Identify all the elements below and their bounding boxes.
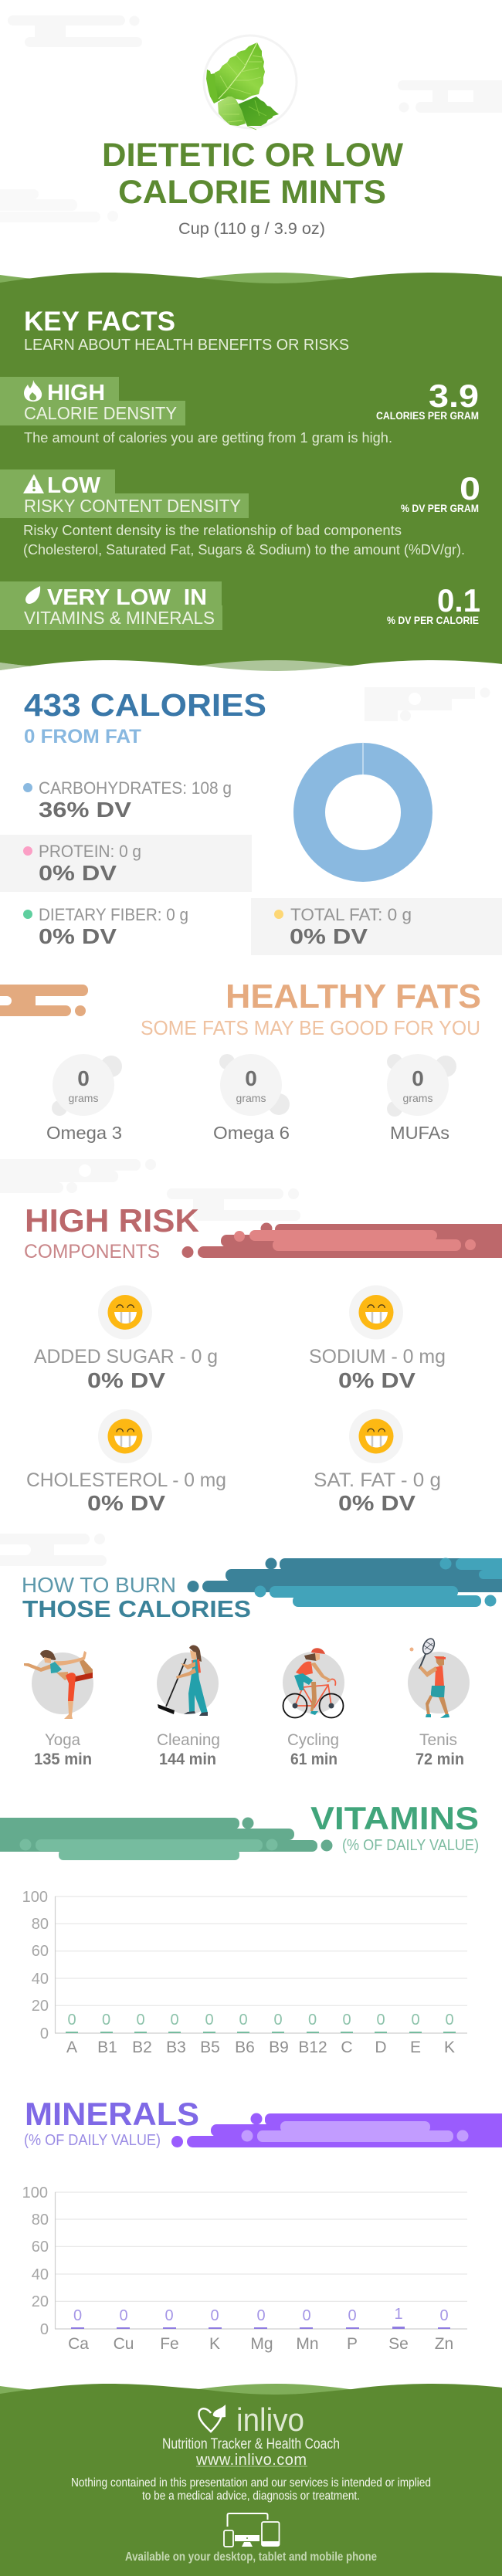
panel: healthy fats [0, 978, 481, 1143]
bar chart: vitamins: 0 [67, 2012, 76, 2029]
icon: mint leaf in circle [204, 36, 297, 130]
bar chart: minerals: 40 [32, 2266, 49, 2283]
component: saturated fat: SAT. FAT - 0 g [314, 1469, 441, 1491]
activity labels: 61 min [290, 1751, 337, 1768]
bar chart: vitamins: 40 [32, 1971, 49, 1988]
fact: vitamins and minerals: % DV PER CALORIE [387, 615, 479, 626]
donut chart [309, 742, 417, 866]
fact: calorie density: CALORIE DENSITY [24, 403, 177, 423]
stat: omega 6: grams [236, 1092, 266, 1104]
website link: www.inlivo.com [195, 2452, 307, 2469]
fact: calorie density: HIGH [47, 381, 105, 405]
bar chart: minerals: Zn [435, 2335, 453, 2353]
nutrient: dietary fiber: 0% DV [39, 924, 117, 948]
nutrient: dietary fiber [23, 905, 188, 948]
decorative band: teal [187, 1558, 502, 1607]
bar chart: vitamins: 60 [32, 1943, 49, 1960]
bar chart: minerals: 0 [165, 2307, 174, 2324]
fact: calorie density: 3.9 [429, 378, 479, 414]
bar chart: minerals [22, 2185, 467, 2353]
bar chart: vitamins: 0 [102, 2012, 110, 2029]
heading: THOSE CALORIES [22, 1595, 251, 1622]
bar chart: vitamins: 20 [32, 1998, 49, 2015]
component: cholesterol: 0% DV [87, 1491, 165, 1515]
bar chart: minerals: 1 [394, 2306, 403, 2323]
stat: mufas: grams [403, 1092, 432, 1104]
panel: vitamins [0, 1800, 479, 2056]
stat: omega 3: Omega 3 [46, 1123, 122, 1143]
fact: risky content density: Risky Content density is the relationship of bad components [23, 523, 402, 538]
fact: calorie density: The amount of calories you are getting from 1 gram is high. [24, 430, 392, 446]
stat: omega 6: 0 [245, 1066, 257, 1090]
activity labels: Yoga [45, 1731, 80, 1749]
bar chart: minerals: Ca [68, 2335, 89, 2353]
bar chart: minerals: 0 [210, 2307, 219, 2324]
activity: cleaning [157, 1646, 219, 1716]
heading: key facts: KEY FACTS [24, 307, 175, 337]
bar chart: vitamins: 0 [445, 2012, 454, 2029]
subheading: components: COMPONENTS [24, 1241, 160, 1263]
stat: mufas: 0 [412, 1066, 424, 1090]
fact: risky content density [0, 469, 480, 558]
fact: vitamins and minerals [0, 581, 480, 630]
subheading: (% OF DAILY VALUE) [342, 1837, 479, 1854]
icon: devices [224, 2513, 280, 2547]
bar chart: minerals: 80 [32, 2212, 49, 2229]
stat: mufas [387, 1054, 456, 1143]
panel: calories [0, 687, 502, 955]
nutrient: protein: 0% DV [39, 861, 117, 885]
bar chart: vitamins: 0 [411, 2012, 420, 2029]
panel: high risk components [24, 1202, 502, 1515]
component: added sugar: ADDED SUGAR - 0 g [34, 1346, 218, 1368]
activity labels: 144 min [159, 1751, 216, 1768]
panel: key facts [0, 273, 502, 673]
bar chart: vitamins: K [444, 2039, 455, 2056]
component: sodium [309, 1285, 446, 1392]
component: sodium: 0% DV [338, 1368, 416, 1392]
bar chart: vitamins: B1 [97, 2039, 117, 2056]
activity: tennis [408, 1637, 470, 1718]
bar chart: vitamins: C [341, 2039, 353, 2056]
bar chart: minerals: 100 [22, 2185, 48, 2201]
stat: omega 3: grams [69, 1092, 98, 1104]
panel: how to burn those calories [22, 1558, 502, 1768]
decorative cloud: top right [398, 80, 502, 113]
stat: omega 3 [46, 1054, 122, 1143]
bar chart: vitamins: B5 [200, 2039, 220, 2056]
bar chart: minerals: Mg [250, 2335, 273, 2353]
component: cholesterol [26, 1409, 226, 1515]
decorative band: peach [0, 985, 88, 1016]
bar chart: vitamins: 0 [376, 2012, 385, 2029]
title: CALORIE MINTS [118, 174, 386, 211]
bar chart: minerals: 0 [302, 2307, 311, 2324]
stat: omega 6 [213, 1054, 290, 1143]
logo: inlivo: inlivo [236, 2401, 304, 2438]
bar chart: minerals: 0 [256, 2307, 266, 2324]
bar chart: vitamins: D [375, 2039, 387, 2056]
nutrient: total fat [274, 905, 412, 948]
bar chart: minerals: Fe [160, 2335, 179, 2353]
bar chart: minerals: Se [388, 2335, 409, 2353]
subheading: (% OF DAILY VALUE) [24, 2132, 161, 2149]
activity labels: 72 min [416, 1751, 464, 1768]
bar chart: minerals: 0 [348, 2307, 357, 2324]
heading: high risk: HIGH RISK [25, 1202, 199, 1239]
component: saturated fat [314, 1409, 441, 1515]
fact: risky content density: LOW [47, 473, 101, 498]
stat: omega 6: Omega 6 [213, 1123, 290, 1143]
subheading: SOME FATS MAY BE GOOD FOR YOU [141, 1016, 480, 1039]
activity labels: Cleaning [157, 1731, 220, 1749]
nutrient: carbohydrates: 36% DV [39, 798, 131, 822]
stat: mufas: MUFAs [390, 1123, 449, 1143]
heading: vitamins: VITAMINS [310, 1800, 479, 1836]
bar chart: vitamins: 0 [136, 2012, 145, 2029]
availability note: Available on your desktop, tablet and mobile phone [125, 2551, 377, 2564]
panel: footer [0, 2384, 502, 2576]
serving size: Cup (110 g / 3.9 oz) [178, 220, 325, 238]
decorative band: purple [171, 2113, 502, 2147]
activity: yoga [24, 1650, 93, 1719]
fact: risky content density: 0 [460, 470, 480, 507]
bar chart: minerals: Cu [114, 2335, 134, 2353]
nutrient: protein: PROTEIN: 0 g [39, 842, 141, 861]
fact: vitamins and minerals: VITAMINS & MINERALS [24, 608, 215, 628]
component: sodium: SODIUM - 0 mg [309, 1346, 446, 1368]
disclaimer: to be a medical advice, diagnosis or treatment. [142, 2490, 360, 2503]
fact: calorie density [0, 377, 479, 446]
fact: vitamins and minerals: 0.1 [437, 582, 480, 619]
bar chart: vitamins: 0 [170, 2012, 179, 2029]
bar chart: vitamins: 80 [32, 1916, 49, 1933]
fact: risky content density: (Cholesterol, Saturated Fat, Sugars & Sodium) to the amount (%DV/gr). [23, 542, 465, 558]
nutrient: protein [23, 842, 141, 885]
bar chart: vitamins: B9 [269, 2039, 289, 2056]
decorative cloud: calories [365, 687, 490, 721]
bar chart: minerals: 20 [32, 2293, 49, 2310]
nutrient: total fat: TOTAL FAT: 0 g [290, 905, 412, 924]
title: DIETETIC OR LOW [102, 137, 403, 174]
bar chart: minerals: 0 [40, 2321, 49, 2338]
heading: minerals: MINERALS [25, 2096, 199, 2132]
subheading: from fat: 0 FROM FAT [24, 726, 141, 747]
bar chart: vitamins: B6 [235, 2039, 255, 2056]
activity labels: Cycling [287, 1731, 339, 1749]
component: added sugar: 0% DV [87, 1368, 165, 1392]
decorative band: red [182, 1223, 502, 1258]
heading [22, 1573, 251, 1622]
bar chart: vitamins: 0 [342, 2012, 351, 2029]
tagline: Nutrition Tracker & Health Coach [162, 2435, 340, 2452]
bar chart: vitamins: 0 [40, 2025, 49, 2042]
bar chart: vitamins: A [66, 2039, 77, 2056]
bar chart: vitamins: B3 [166, 2039, 186, 2056]
activity labels [34, 1731, 464, 1768]
panel: minerals [22, 2096, 502, 2353]
fact: risky content density: RISKY CONTENT DENSITY [24, 496, 241, 516]
component: saturated fat: 0% DV [338, 1491, 416, 1515]
activity labels: Tenis [419, 1731, 457, 1749]
bar chart: vitamins: B12 [298, 2039, 327, 2056]
logo: inlivo [198, 2401, 304, 2438]
bar chart: minerals: P [347, 2335, 358, 2353]
heading: healthy fats: HEALTHY FATS [226, 978, 481, 1015]
bar chart: minerals: Mn [296, 2335, 319, 2353]
activity: cycling [283, 1648, 344, 1717]
heading: calories: 433 CALORIES [24, 687, 266, 723]
bar chart: minerals: 0 [119, 2307, 128, 2324]
decorative cloud: top left [8, 15, 142, 47]
bar chart: minerals: 60 [32, 2239, 49, 2256]
fact: calorie density: CALORIES PER GRAM [376, 410, 479, 422]
component: added sugar [34, 1285, 218, 1392]
fact: risky content density: % DV PER GRAM [401, 503, 479, 514]
disclaimer: Nothing contained in this presentation and our services is intended or implied [71, 2476, 431, 2490]
bar chart: minerals: 0 [439, 2307, 449, 2324]
bar chart: vitamins: 0 [239, 2012, 248, 2029]
title [102, 137, 403, 211]
bar chart: vitamins: 100 [22, 1889, 48, 1906]
nutrient: total fat: 0% DV [290, 924, 368, 948]
decorative cloud: left [0, 189, 118, 222]
bar chart: vitamins: 0 [205, 2012, 214, 2029]
bar chart: minerals: 0 [73, 2307, 82, 2324]
heading: HOW TO BURN [22, 1573, 176, 1597]
activity labels: 135 min [34, 1751, 92, 1768]
bar chart: vitamins [22, 1889, 467, 2056]
nutrient: dietary fiber: DIETARY FIBER: 0 g [39, 905, 188, 924]
bar chart: vitamins: E [410, 2039, 421, 2056]
fact: vitamins and minerals: VERY LOW IN [47, 585, 207, 610]
bar chart: vitamins: B2 [132, 2039, 152, 2056]
nutrient: carbohydrates [23, 778, 232, 822]
decorative cloud: above burn [0, 1534, 107, 1566]
decorative clouds: above high risk [0, 1159, 300, 1221]
stat: omega 3: 0 [77, 1066, 90, 1090]
disclaimer [71, 2476, 431, 2503]
subheading: LEARN ABOUT HEALTH BENEFITS OR RISKS [24, 337, 349, 354]
component: cholesterol: CHOLESTEROL - 0 mg [26, 1469, 226, 1491]
bar chart: minerals: K [209, 2335, 220, 2353]
nutrient: carbohydrates: CARBOHYDRATES: 108 g [39, 778, 232, 798]
bar chart: vitamins: 0 [308, 2012, 317, 2029]
bar chart: vitamins: 0 [273, 2012, 283, 2029]
decorative band: green [0, 1818, 332, 1860]
